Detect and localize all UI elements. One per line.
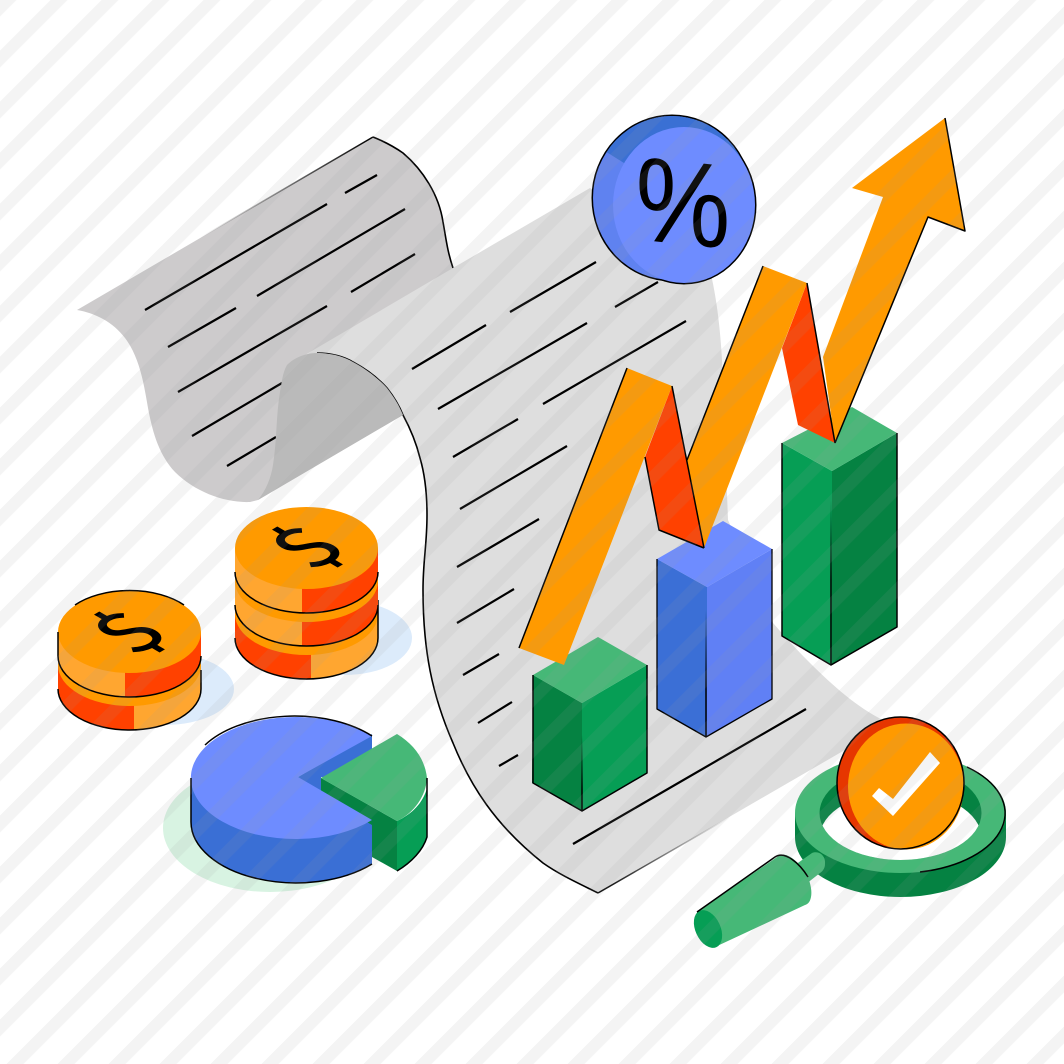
paper edge outline	[317, 353, 598, 893]
shadow: left coin stack	[96, 653, 234, 725]
coin 1	[57, 591, 201, 697]
dollar sign: $	[235, 506, 370, 583]
paper: rolled back sheet	[77, 137, 460, 502]
bar: green right	[782, 407, 897, 665]
handle neck	[795, 852, 825, 884]
coin 3	[234, 600, 379, 680]
coin 2	[234, 578, 379, 647]
handle	[688, 855, 811, 952]
coin 1	[235, 506, 378, 613]
coin stack: left	[57, 591, 201, 730]
magnifying glass	[688, 717, 1006, 952]
text lines on main sheet	[412, 262, 806, 844]
ring	[795, 753, 1006, 897]
percent sign: %	[634, 132, 732, 275]
bar: blue middle	[657, 521, 772, 737]
check mark	[872, 752, 940, 816]
pie: blue side	[191, 734, 372, 883]
text lines on back sheet	[145, 175, 415, 466]
dollar sign: $	[57, 591, 192, 668]
coin 2	[57, 662, 202, 731]
coin stack: right	[235, 506, 378, 679]
pie chart	[191, 716, 427, 883]
bar: green left	[532, 637, 647, 811]
shadow: right coin stack	[278, 601, 412, 675]
pie: blue top	[191, 716, 372, 883]
growth arrow	[519, 118, 965, 665]
check coin	[837, 717, 964, 850]
shadow: pie chart	[163, 764, 377, 892]
pie slice: green	[321, 734, 427, 871]
paper: main sheet	[293, 188, 883, 893]
paper: dark inside of roll	[258, 353, 403, 500]
pie slice: green front face	[321, 778, 397, 871]
percent coin	[593, 116, 755, 283]
